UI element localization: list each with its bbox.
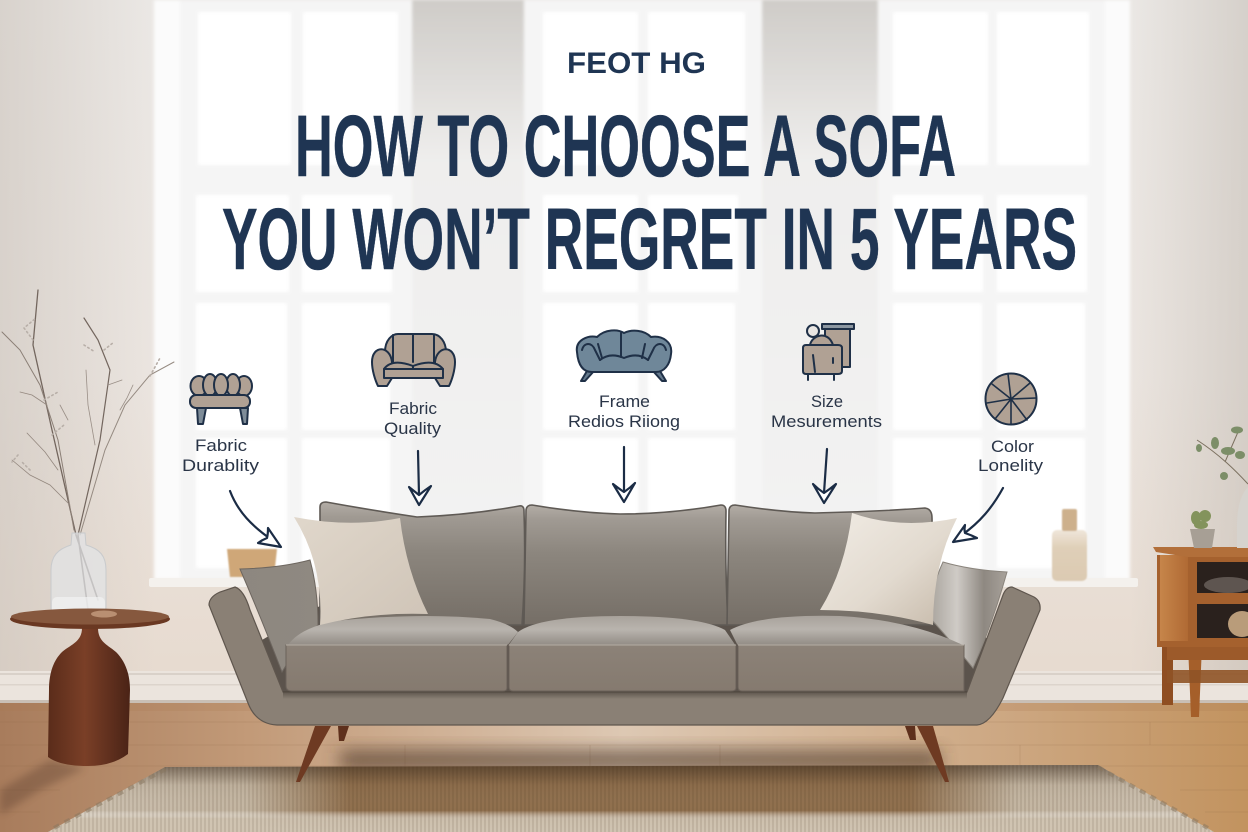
label: size measurements: Mesurements <box>771 413 882 431</box>
seat backing <box>262 600 990 695</box>
arrow: frame to sofa <box>613 447 635 502</box>
label: size measurements: Size <box>811 393 843 411</box>
sofa legs <box>296 726 949 782</box>
label: color: Color <box>991 438 1035 456</box>
seat cushions <box>286 616 964 691</box>
icon: color wheel <box>986 374 1036 424</box>
sofa frame and arms <box>209 587 1040 725</box>
throw pillow: left <box>294 517 428 625</box>
vase with branches <box>2 290 174 619</box>
window sill <box>149 578 1138 587</box>
throw pillow: right <box>820 513 957 625</box>
jar on sill <box>1052 509 1087 581</box>
icon: scalloped bench <box>190 374 252 424</box>
sideboard with plants <box>1153 426 1248 717</box>
label: frame <box>568 393 680 431</box>
rug <box>48 765 1214 832</box>
side table <box>10 608 170 766</box>
label: fabric quality: Fabric <box>389 400 437 418</box>
label: color: Lonelity <box>978 457 1044 475</box>
arrow: size to sofa <box>813 449 836 503</box>
skirting board <box>0 671 1248 703</box>
arrow: color to sofa <box>953 488 1003 542</box>
arm pillow: left <box>240 560 318 672</box>
label: frame: Frame <box>599 393 650 411</box>
back cushions <box>320 502 934 625</box>
plant pot on sill <box>227 549 277 577</box>
label: fabric quality <box>384 400 442 438</box>
icon: armchair with cabinet <box>803 324 854 380</box>
wood floor <box>0 703 1248 832</box>
eyebrow heading: FEOT HG <box>567 47 706 80</box>
icon: tan loveseat <box>372 334 455 386</box>
label: fabric durability: Durablity <box>182 457 260 475</box>
label: fabric durability <box>182 437 260 475</box>
title <box>222 98 1077 288</box>
label: fabric durability: Fabric <box>195 437 247 455</box>
label: frame: Redios Riiong <box>568 413 680 431</box>
label: fabric quality: Quality <box>384 420 442 438</box>
label: size measurements <box>771 393 882 431</box>
arm pillow: right <box>930 562 1007 668</box>
arrow: fabric durability to sofa <box>230 491 281 547</box>
front rail shadow <box>283 691 967 699</box>
icon: blue curved sofa <box>577 330 671 381</box>
label: color <box>978 438 1044 475</box>
sofa <box>209 502 1040 782</box>
arrow: fabric quality to sofa <box>409 451 431 505</box>
windows <box>154 0 1130 580</box>
